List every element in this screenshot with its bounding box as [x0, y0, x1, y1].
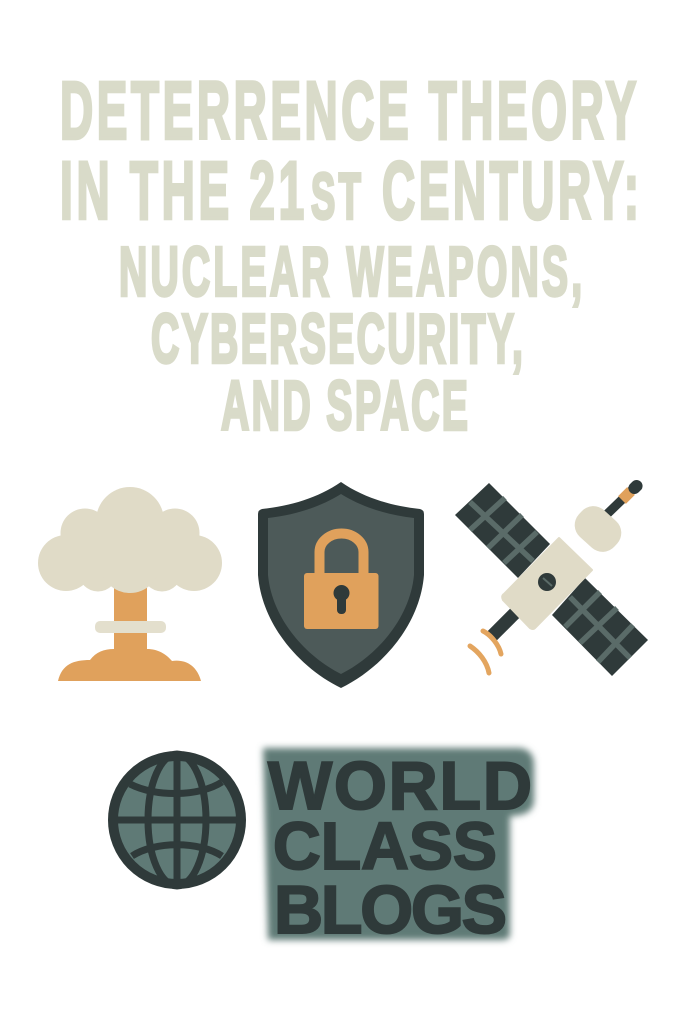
signal arcs — [470, 631, 501, 673]
solar panel upper left — [455, 483, 550, 578]
title line 2: ST — [311, 161, 361, 233]
icon: mushroom cloud — [38, 487, 222, 681]
title line 2: CENTURY: — [382, 146, 639, 237]
subtitle line 1: NUCLEAR WEAPONS, — [119, 234, 582, 312]
title line 1: DETERRENCE THEORY — [60, 66, 636, 157]
logo: globe — [110, 752, 244, 888]
icon: satellite — [455, 477, 648, 676]
icon: shield with padlock — [258, 482, 424, 688]
logo: World Class Blogs wordmark — [263, 748, 534, 948]
dish — [568, 500, 628, 558]
satellite body — [502, 538, 592, 629]
solar panel lower right — [552, 578, 648, 676]
lower stem — [491, 608, 520, 637]
wordmark line 1: WORLD — [268, 748, 532, 824]
subtitle line 3: AND SPACE — [221, 368, 468, 446]
title — [60, 66, 639, 446]
subtitle line 2: CYBERSECURITY, — [151, 301, 523, 379]
title line 2 — [60, 146, 639, 237]
wordmark blurred backdrop — [263, 748, 534, 940]
wordmark line 2: CLASS — [273, 809, 497, 884]
antenna — [604, 490, 632, 517]
wordmark line 3: BLOGS — [274, 872, 507, 948]
title line 2: IN THE 21 — [60, 146, 304, 237]
padlock — [304, 534, 378, 629]
